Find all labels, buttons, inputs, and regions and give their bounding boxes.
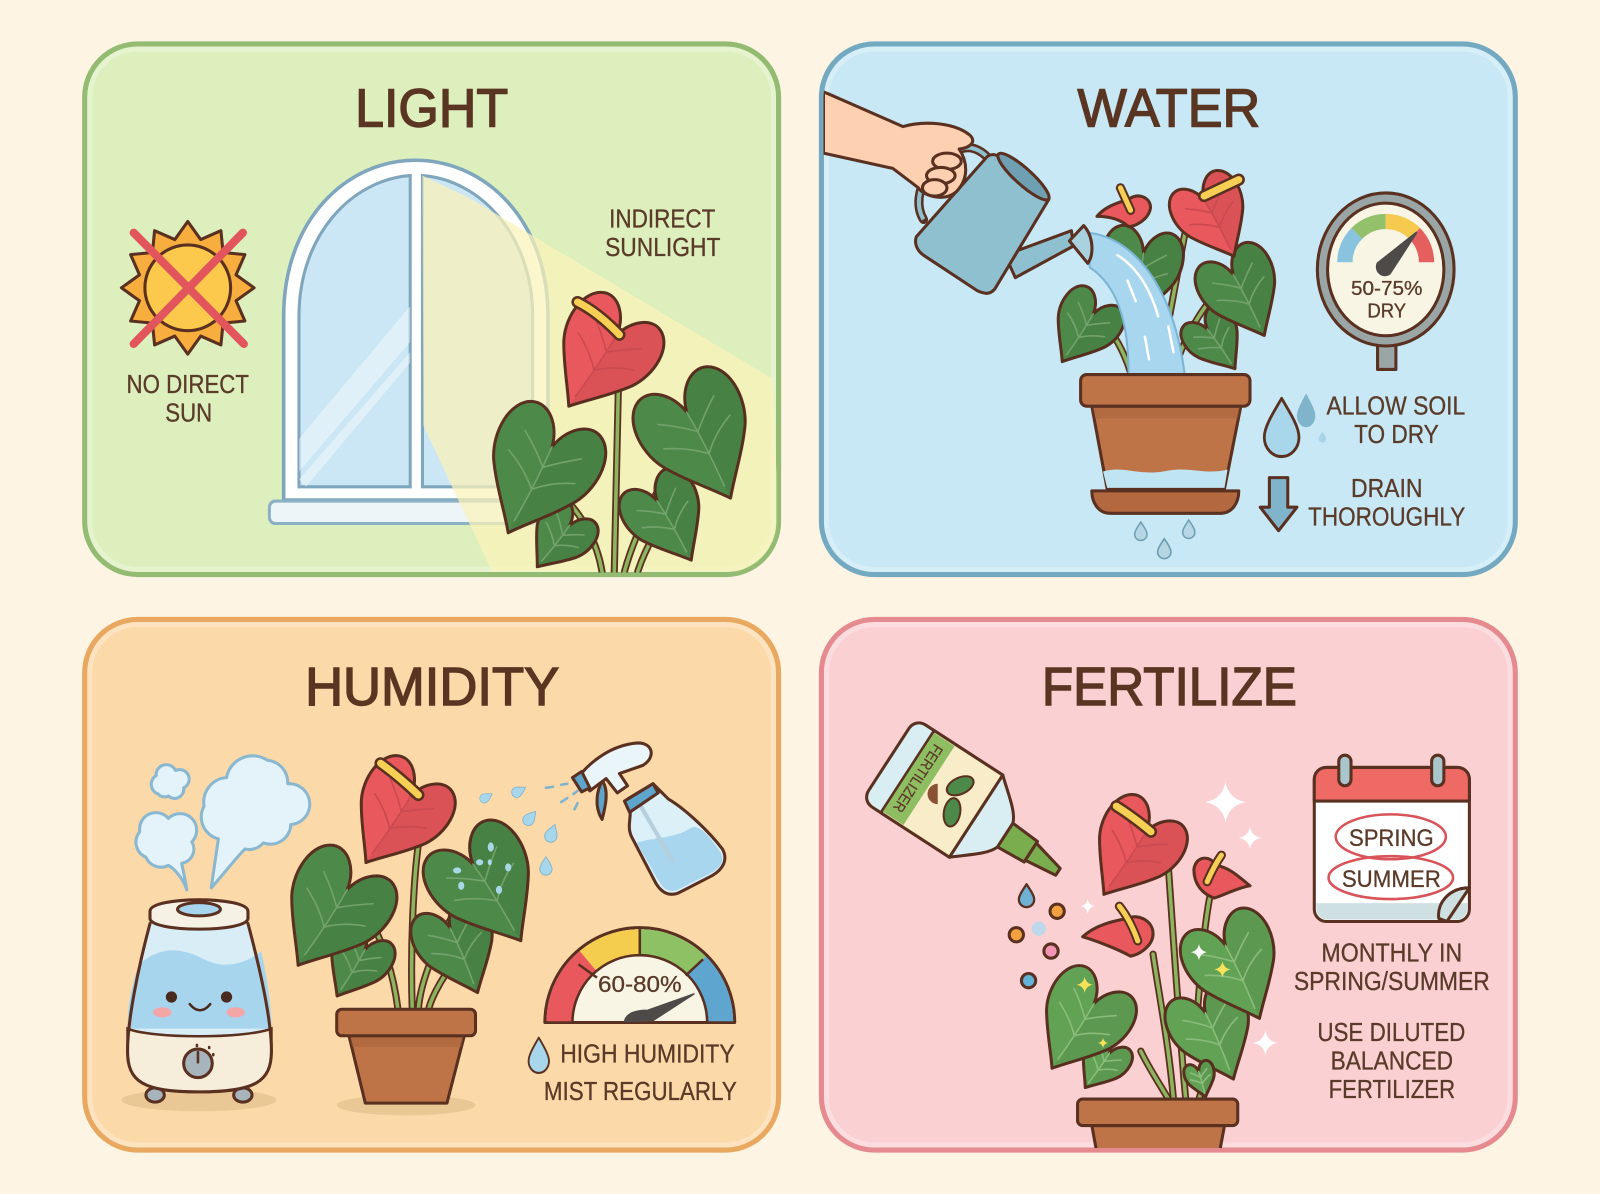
- diluted balanced fertilizer label: BALANCED: [1331, 1047, 1453, 1075]
- diluted balanced fertilizer label: USE DILUTED: [1317, 1019, 1465, 1047]
- soil moisture gauge: 50-75%: [1351, 278, 1422, 300]
- sparkles: [1077, 782, 1278, 1055]
- drain thoroughly label: [1308, 475, 1465, 532]
- monthly in spring and summer label: [1294, 939, 1490, 996]
- no direct sun label: SUN: [165, 399, 212, 427]
- monthly in spring and summer label: SPRING/SUMMER: [1294, 968, 1490, 996]
- icon: arched window: [269, 160, 557, 524]
- panel: fertilize: [821, 619, 1515, 1153]
- drain thoroughly label: DRAIN: [1351, 475, 1422, 503]
- water panel background: [821, 44, 1515, 575]
- icon: smiling humidifier: [121, 900, 277, 1111]
- indirect sunlight label: SUNLIGHT: [605, 234, 720, 262]
- icon: soil drops: [1264, 394, 1326, 457]
- panel: light: [85, 44, 781, 585]
- icon: calendar: SPRING: [1349, 825, 1434, 852]
- icon: crossed out sun: [121, 221, 254, 354]
- no direct sun label: [127, 371, 249, 427]
- icon: hand holding watering can: [823, 92, 1092, 293]
- indirect sunlight label: [605, 206, 720, 262]
- allow soil to dry label: ALLOW SOIL: [1327, 392, 1465, 420]
- icon: fertilizer bottle: [862, 718, 1086, 911]
- high humidity label: [529, 1038, 735, 1073]
- fertilize heading: FERTILIZE: [1042, 657, 1297, 717]
- panel: water: [821, 44, 1515, 575]
- water heading: WATER: [1078, 79, 1260, 139]
- fertilizer drop and pellets: [1009, 884, 1064, 988]
- humidity gauge: [545, 928, 735, 1023]
- icon: calendar: [1314, 755, 1469, 921]
- plant in humidity panel: [255, 747, 565, 1115]
- drain thoroughly label: THOROUGHLY: [1308, 504, 1465, 532]
- monthly in spring and summer label: MONTHLY IN: [1321, 939, 1462, 967]
- panel: humidity: [85, 619, 779, 1150]
- soil moisture gauge: [1317, 193, 1454, 369]
- water stream: [1088, 233, 1185, 375]
- icon: terracotta pot with saucer: [1081, 375, 1250, 513]
- humidity heading: HUMIDITY: [305, 657, 559, 717]
- humidity panel background: [85, 619, 779, 1150]
- icon: mist clouds: [136, 756, 310, 890]
- light panel background: [85, 44, 779, 575]
- allow soil to dry label: TO DRY: [1354, 421, 1439, 449]
- humidity gauge: 60-80%: [598, 971, 682, 997]
- allow soil to dry label: [1327, 392, 1465, 449]
- no direct sun label: NO DIRECT: [127, 371, 249, 399]
- icon: fertilizer bottle: FERTILIZER: [889, 741, 946, 815]
- diluted balanced fertilizer label: [1317, 1019, 1465, 1104]
- plant in water panel: [1035, 164, 1299, 385]
- icon: draining drops: [1135, 520, 1195, 559]
- fertilize panel background: [821, 619, 1515, 1150]
- spray droplets: [478, 783, 578, 875]
- diluted balanced fertilizer label: FERTILIZER: [1329, 1076, 1455, 1104]
- icon: clay pot: [337, 1009, 476, 1103]
- mist regularly label: MIST REGULARLY: [544, 1078, 737, 1106]
- indirect sunlight beam: [422, 176, 781, 571]
- icon: spray bottle: [572, 743, 725, 894]
- high humidity label: HIGH HUMIDITY: [560, 1040, 735, 1068]
- plant in fertilize panel: [1045, 793, 1276, 1148]
- soil moisture gauge: DRY: [1367, 300, 1406, 322]
- light heading: LIGHT: [355, 79, 508, 139]
- icon: down arrow: [1260, 478, 1297, 531]
- indirect sunlight label: INDIRECT: [609, 206, 715, 234]
- anthurium plant: [492, 290, 747, 572]
- icon: calendar: SUMMER: [1342, 866, 1441, 893]
